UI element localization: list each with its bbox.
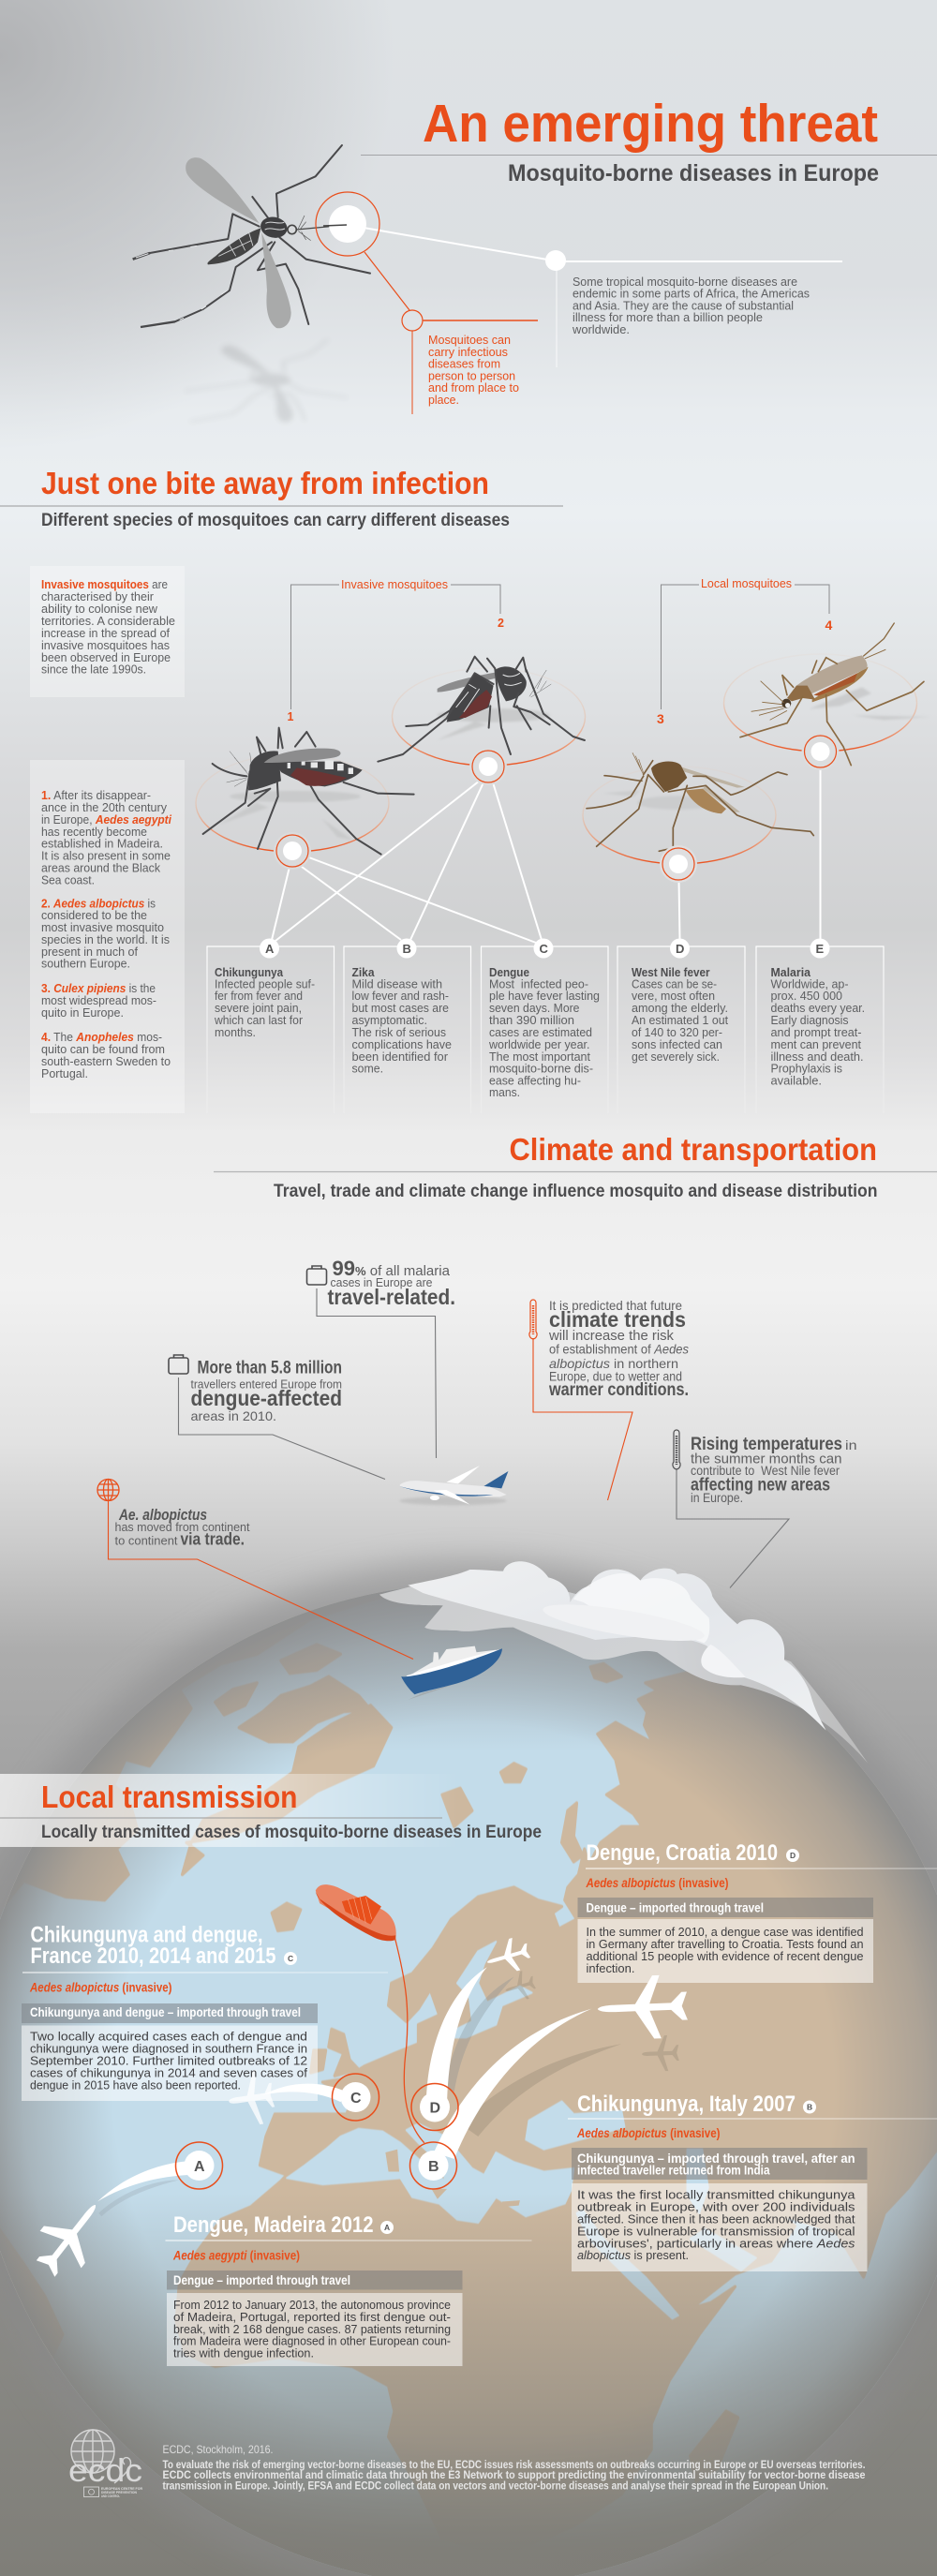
panel: invasive mosquitoes: been observed in Europe — [41, 651, 171, 664]
panel: invasive mosquitoes: ability to colonise new — [41, 603, 158, 616]
disease box D: West Nile fever: Cases can be se- — [632, 978, 717, 991]
panel: species notes — [30, 760, 185, 1113]
band: local transmission heading — [0, 1774, 459, 1847]
map marker A: A — [194, 2159, 205, 2175]
disease box B: Zika: asymptomatic. — [352, 1014, 427, 1027]
disease box E: Malaria: Worldwide, ap- — [770, 978, 849, 991]
panel: chikungunya and dengue France: chikungunya were diagnosed in southern France in — [30, 2041, 307, 2056]
panel: species notes: southern Europe. — [41, 958, 130, 971]
callout: albopictus via trade: via trade. — [180, 1529, 245, 1548]
disease box E: Malaria: Malaria — [770, 966, 811, 979]
callout: rising temperatures: the summer months can — [691, 1451, 841, 1467]
callout: mosquitoes carry diseases: carry infectious — [428, 346, 508, 359]
disease box B: Zika: complications have — [352, 1038, 452, 1051]
callout: climate trends: warmer conditions. — [548, 1380, 689, 1400]
panel: dengue Madeira: from Madeira were diagnosed in other European coun- — [173, 2333, 451, 2348]
panel: species notes: 4. The Anopheles mos- — [41, 1031, 162, 1044]
disease box B: Zika: B — [403, 942, 411, 956]
panel: dengue Croatia: Dengue, Croatia 2010 — [587, 1840, 778, 1866]
callout: climate trends: albopictus in northern — [549, 1356, 678, 1371]
callout: travellers from dengue areas: More than 5.8 million — [197, 1359, 342, 1377]
panel: chikungunya and dengue France: C — [288, 1954, 293, 1963]
subheading: locally transmitted: Locally transmitted cases of mosquito-borne diseases in Europe — [41, 1823, 542, 1842]
icon: globe — [97, 1479, 119, 1501]
panel: chikungunya Italy: Aedes albopictus (invasive) — [576, 2125, 720, 2140]
panel: chikungunya Italy: Europe is vulnerable for transmission of tropical — [577, 2225, 855, 2238]
disease box C: Dengue — [482, 939, 608, 1113]
connector lines — [272, 767, 821, 943]
panel: invasive mosquitoes: characterised by their — [41, 590, 154, 603]
callout: malaria travel-related — [307, 1257, 455, 1458]
species 1: Aedes aegypti mosquito — [196, 728, 414, 870]
panel: chikungunya Italy: albopictus is present. — [577, 2248, 689, 2262]
map marker B: B — [428, 2159, 439, 2175]
logo: ECDC: ecdc — [68, 2453, 142, 2489]
disease box D: West Nile fever: get severely sick. — [632, 1050, 720, 1064]
callout: travellers from dengue areas: travellers entered Europe from — [191, 1377, 342, 1391]
panel: dengue Madeira: Dengue – imported through travel — [173, 2272, 350, 2287]
disease box C: Dengue: cases are estimated — [489, 1026, 592, 1039]
bracket: local mosquitoes: Local mosquitoes — [701, 577, 792, 590]
disease box E: Malaria: Early diagnosis — [770, 1014, 849, 1027]
species 2: Aedes albopictus mosquito — [378, 657, 585, 785]
panel: dengue Croatia: in Germany after travelling to Croatia. Tests found an — [587, 1937, 864, 1951]
panel: dengue Croatia: additional 15 people with evidence of recent dengue — [587, 1949, 864, 1963]
panel: dengue Croatia: infection. — [587, 1961, 635, 1975]
panel: species notes: has recently become — [41, 826, 147, 839]
callout: mosquitoes carry diseases: person to person — [428, 369, 515, 382]
icon: blue plane — [399, 1466, 508, 1505]
panel: chikungunya Italy: outbreak in Europe, with over 200 individuals — [577, 2200, 855, 2213]
panel: invasive mosquitoes: since the late 1990s. — [41, 663, 146, 677]
callout: tropical diseases: endemic in some parts of Africa, the Americas — [573, 287, 810, 300]
bracket: invasive mosquitoes: 2 — [498, 617, 504, 630]
callout: rising temperatures: in Europe. — [691, 1491, 743, 1505]
panel: species notes: species in the world. It is — [41, 933, 170, 946]
callout: travellers from dengue areas: dengue-affected — [191, 1386, 342, 1410]
disease box C: Dengue: worldwide per year. — [488, 1038, 590, 1051]
panel: dengue Madeira: of Madeira, Portugal, reported its first dengue out- — [173, 2310, 451, 2324]
callout: travellers from dengue areas: areas in 2010. — [191, 1408, 276, 1423]
callout: climate trends: of establishment of Aedes — [549, 1342, 689, 1357]
panel: chikungunya and dengue France: cases of chikungunya in 2014 and seven cases of — [30, 2065, 307, 2080]
panel: dengue Madeira — [165, 2212, 532, 2366]
title: An emerging threat — [423, 94, 878, 154]
map marker C: C — [350, 2091, 362, 2107]
icon: mosquito shadow — [186, 340, 347, 422]
logo: ECDC: EUROPEAN CENTRE FOR — [101, 2487, 142, 2491]
panel: species notes: established in Madeira. — [41, 838, 163, 851]
disease box C: Dengue: ple have fever lasting — [489, 990, 600, 1003]
footer text: ECDC, Stockholm, 2016. — [163, 2443, 274, 2456]
callout: travellers from dengue areas — [169, 1355, 385, 1479]
map: islands — [385, 2150, 520, 2207]
footer text: transmission in Europe. Jointly, EFSA and ECDC collect data on vectors and vector-borne diseases and analyse their spread in the European Union. — [163, 2481, 828, 2493]
panel: species notes: It is also present in some — [41, 849, 171, 862]
icon: blue ship — [401, 1646, 502, 1700]
icon: thermometer — [673, 1430, 680, 1469]
panel: invasive mosquitoes — [30, 566, 185, 697]
callout: mosquitoes carry diseases — [364, 252, 538, 414]
panel: chikungunya and dengue France: Aedes albopictus (invasive) — [29, 1979, 172, 1994]
logo: ECDC: AND CONTROL — [101, 2494, 121, 2498]
panel: chikungunya and dengue France: September 2010. Further limited outbreaks of 12 — [30, 2054, 307, 2067]
panel: species notes: 1. After its disappear- — [41, 789, 151, 802]
footer text — [163, 2443, 866, 2493]
disease box C: Dengue: mans. — [489, 1086, 520, 1099]
map: land masses — [0, 1644, 937, 2504]
panel: species notes: areas around the Black — [41, 862, 161, 875]
panel: chikungunya Italy: arboviruses', particularly in areas where Aedes — [577, 2236, 855, 2251]
orange container ship — [316, 1884, 424, 2143]
panel: species notes: south-eastern Sweden to — [41, 1055, 171, 1068]
disease box A: Chikungunya: A — [265, 942, 275, 956]
disease box E: Malaria: illness and death. — [770, 1050, 864, 1064]
panel: dengue Madeira: break, with 2 168 dengue cases. 87 patients returning — [173, 2322, 451, 2336]
map marker C — [332, 2074, 379, 2121]
globe — [0, 1536, 937, 2576]
footer text: ECDC collects environmental and climatic data through the E3 Network to support predicting the environmental suitability for vector-borne disease — [163, 2470, 866, 2481]
panel: chikungunya and dengue France: dengue in 2015 have also been reported. — [30, 2078, 241, 2092]
callout: malaria travel-related: 99% of all malaria — [332, 1257, 451, 1280]
panel: invasive mosquitoes: territories. A considerable — [41, 615, 175, 628]
disease box A: Chikungunya: fer from fever and — [215, 990, 303, 1003]
callout: tropical diseases: worldwide. — [572, 323, 630, 336]
disease box B: Zika: Zika — [352, 966, 376, 979]
panel: chikungunya and dengue France — [22, 1923, 388, 2101]
callout: climate trends: will increase the risk — [548, 1328, 674, 1344]
panel: chikungunya Italy: B — [807, 2103, 812, 2112]
panel: chikungunya Italy: It was the first locally transmitted chikungunya — [577, 2187, 855, 2202]
callout: malaria travel-related: travel-related. — [328, 1285, 455, 1309]
panel: chikungunya and dengue France: Two locally acquired cases each of dengue and — [30, 2030, 307, 2043]
panel: dengue Croatia: Aedes albopictus (invasive) — [586, 1875, 729, 1890]
panel: species notes: most invasive mosquito — [41, 921, 164, 934]
disease box E: Malaria: prox. 450 000 — [770, 990, 842, 1003]
callout: rising temperatures — [673, 1430, 856, 1587]
subheading: travel and trade: Travel, trade and climate change influence mosquito and disease distribution — [274, 1182, 877, 1201]
panel: species notes: 3. Culex pipiens is the — [41, 982, 156, 995]
disease box C: Dengue: The most important — [489, 1050, 591, 1064]
panel: dengue Croatia: D — [790, 1851, 796, 1860]
disease box D: West Nile fever: West Nile fever — [632, 966, 710, 979]
panel: dengue Croatia — [577, 1840, 937, 1983]
callout: tropical diseases: illness for more than a billion people — [573, 311, 763, 324]
panel: chikungunya Italy: Chikungunya – imported through travel, after an — [577, 2151, 855, 2166]
disease box A: Chikungunya: which can last for — [214, 1014, 303, 1027]
clouds — [379, 1561, 868, 1764]
callout: albopictus via trade: has moved from continent — [114, 1520, 250, 1534]
callout: rising temperatures: Rising temperatures — [691, 1435, 842, 1454]
disease box B: Zika — [344, 939, 470, 1113]
disease box D: West Nile fever: vere, most often — [632, 990, 715, 1003]
callout: climate trends — [529, 1298, 689, 1500]
panel: species notes: Portugal. — [41, 1067, 88, 1080]
callout: albopictus via trade: to continent — [114, 1533, 178, 1548]
disease box A: Chikungunya: months. — [215, 1026, 256, 1039]
callout: climate trends: climate trends — [549, 1307, 686, 1332]
callout: tropical diseases — [316, 192, 842, 367]
panel: dengue Madeira: Aedes aegypti (invasive) — [172, 2247, 300, 2262]
panel: species notes: 2. Aedes albopictus is — [41, 898, 156, 911]
species 3: Culex pipiens mosquito — [583, 752, 813, 883]
panel: dengue Croatia: Dengue – imported through travel — [587, 1900, 764, 1915]
bracket: local mosquitoes: 4 — [825, 618, 832, 633]
map marker D — [411, 2084, 458, 2131]
callout: albopictus via trade: Ae. albopictus — [118, 1506, 207, 1524]
disease box A: Chikungunya: severe joint pain, — [215, 1002, 302, 1015]
panel: chikungunya and dengue France: France 2010, 2014 and 2015 — [30, 1943, 275, 1969]
disease box B: Zika: low fever and rash- — [352, 990, 449, 1003]
panel: species notes: ance in the 20th century — [41, 801, 168, 814]
map: seas — [287, 1942, 756, 2318]
panel: species notes: quito can be found from — [41, 1043, 165, 1056]
disease box C: Dengue: mosquito-borne dis- — [489, 1063, 593, 1076]
heading: just one bite: Just one bite away from infection — [41, 466, 489, 500]
disease box B: Zika: Mild disease with — [352, 978, 442, 991]
bracket: invasive mosquitoes: 1 — [287, 710, 294, 723]
bracket: invasive mosquitoes: Invasive mosquitoes — [341, 578, 448, 591]
subheading: species: Different species of mosquitoes can carry different diseases — [41, 511, 510, 530]
logo: ECDC — [68, 2430, 142, 2498]
callout: albopictus via trade — [97, 1479, 413, 1659]
callout: rising temperatures: in — [845, 1437, 856, 1452]
arc shadows — [98, 1969, 679, 2216]
disease box D: West Nile fever: D — [676, 942, 684, 956]
disease box E: Malaria — [756, 939, 884, 1113]
disease box D: West Nile fever — [617, 939, 745, 1113]
panel: invasive mosquitoes: invasive mosquitoes has — [41, 639, 170, 652]
white flight arcs — [25, 1934, 689, 2287]
icon: thermometer — [529, 1300, 537, 1339]
disease box A: Chikungunya: Infected people suf- — [215, 978, 315, 991]
callout: malaria travel-related: cases in Europe are — [330, 1275, 433, 1289]
callout: mosquitoes carry diseases: place. — [428, 394, 459, 407]
callout: rising temperatures: affecting new areas — [691, 1475, 830, 1496]
disease box C: Dengue: seven days. More — [489, 1002, 580, 1015]
panel: dengue Croatia: In the summer of 2010, a dengue case was identified — [587, 1925, 864, 1939]
panel: species notes: most widespread mos- — [41, 994, 156, 1007]
disease box C: Dengue: ease affecting hu- — [489, 1074, 581, 1087]
disease box E: Malaria: ment can prevent — [770, 1038, 862, 1051]
disease box C: Dengue: Most infected peo- — [489, 978, 588, 991]
panel: species notes: in Europe, Aedes aegypti — [41, 813, 171, 826]
subtitle: Mosquito-borne diseases in Europe — [508, 160, 879, 186]
map marker D: D — [429, 2101, 440, 2116]
callout: climate trends: Europe, due to wetter and — [549, 1368, 682, 1383]
callout: tropical diseases: Some tropical mosquito-borne diseases are — [573, 275, 797, 289]
callout: tropical diseases: and Asia. They are the cause of substantial — [573, 300, 794, 313]
disease box A: Chikungunya — [207, 939, 334, 1113]
callout: mosquitoes carry diseases: diseases from — [428, 358, 500, 371]
disease box E: Malaria: available. — [770, 1074, 822, 1087]
icon: main mosquito — [133, 145, 370, 328]
panel: chikungunya and dengue France: Chikungunya and dengue, — [30, 1923, 262, 1947]
disease box C: Dengue: than 390 million — [489, 1014, 574, 1027]
panel: species notes: quito in Europe. — [41, 1006, 124, 1020]
map annotations — [0, 1774, 689, 2287]
disease box A: Chikungunya: Chikungunya — [215, 966, 284, 979]
panel: chikungunya Italy — [568, 2092, 937, 2271]
heading: local transmission: Local transmission — [41, 1779, 298, 1814]
bracket: local mosquitoes — [657, 577, 832, 726]
callout: climate trends: It is predicted that future — [549, 1298, 682, 1313]
disease box D: West Nile fever: among the elderly. — [632, 1002, 728, 1015]
panel: chikungunya Italy: affected. Since then it has been acknowledged that — [577, 2211, 855, 2226]
disease box D: West Nile fever: sons infected can — [632, 1038, 722, 1051]
icon: suitcase — [169, 1355, 188, 1374]
panel: chikungunya Italy: Chikungunya, Italy 2007 — [577, 2092, 796, 2117]
panel: species notes: Sea coast. — [41, 873, 95, 886]
disease box B: Zika: The risk of serious — [352, 1026, 446, 1039]
disease box E: Malaria: and prompt treat- — [770, 1026, 862, 1039]
disease box E: Malaria: E — [815, 942, 825, 956]
panel: dengue Madeira: From 2012 to January 2013, the autonomous province — [173, 2298, 451, 2312]
panel: dengue Madeira: tries with dengue infection. — [173, 2346, 314, 2360]
species 4: Anopheles mosquito — [723, 623, 930, 770]
icon: suitcase — [307, 1266, 326, 1285]
callout: mosquitoes carry diseases: and from place to — [428, 381, 519, 395]
panel: chikungunya Italy: infected traveller returned from India — [577, 2163, 770, 2178]
disease box B: Zika: but most cases are — [352, 1002, 449, 1015]
map marker A — [176, 2142, 223, 2189]
callout: mosquitoes carry diseases: Mosquitoes can — [428, 334, 511, 347]
panel: invasive mosquitoes: increase in the spread of — [41, 627, 171, 640]
panel: species notes: considered to be the — [41, 909, 147, 922]
disease box B: Zika: some. — [352, 1063, 383, 1076]
panel: chikungunya and dengue France: Chikungunya and dengue – imported through travel — [30, 2004, 301, 2019]
disease box C: Dengue: Dengue — [489, 966, 529, 979]
panel: dengue Madeira: Dengue, Madeira 2012 — [173, 2212, 373, 2238]
disease box E: Malaria: deaths every year. — [770, 1002, 865, 1015]
disease box B: Zika: been identified for — [352, 1050, 448, 1064]
disease box E: Malaria: Prophylaxis is — [770, 1063, 842, 1076]
callout: rising temperatures: contribute to West Nile fever — [691, 1464, 840, 1478]
heading: climate and transportation: Climate and transportation — [510, 1132, 877, 1167]
bracket: invasive mosquitoes — [287, 578, 504, 723]
bracket: local mosquitoes: 3 — [657, 711, 664, 726]
map marker B — [410, 2142, 457, 2189]
disease box D: West Nile fever: of 140 to 320 per- — [632, 1026, 722, 1039]
logo: ECDC: DISEASE PREVENTION — [101, 2491, 137, 2494]
panel: dengue Madeira: A — [384, 2223, 390, 2232]
disease box D: West Nile fever: An estimated 1 out — [632, 1014, 729, 1027]
panel: species notes: present in much of — [41, 946, 139, 959]
panel: invasive mosquitoes: Invasive mosquitoes are — [41, 578, 168, 591]
disease box C: Dengue: C — [540, 942, 549, 956]
